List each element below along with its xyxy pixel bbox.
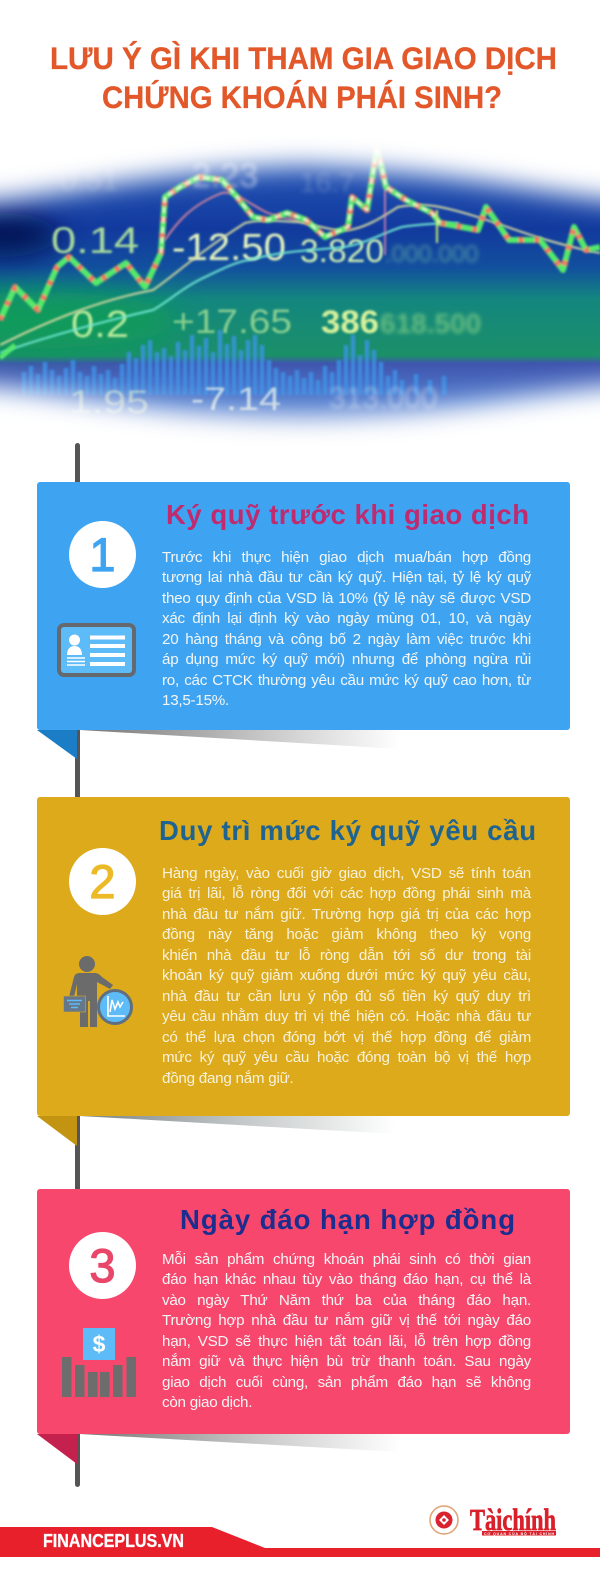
moving average lines [0, 193, 600, 353]
bright numbers [51, 220, 384, 420]
number 2: 2 [89, 855, 116, 908]
faded numbers: 0.51 [60, 164, 118, 197]
panel 2 text: khoản ký quỹ giảm xuống dưới mức ký quỹ yêu cầu, [162, 967, 531, 984]
panel 2 text [162, 865, 532, 1087]
panel 1 text: ro, các CTCK thường yêu cầu mức ký quỹ cao hơn, từ [162, 672, 531, 689]
title: CHỨNG KHOÁN PHÁI SINH? [102, 79, 502, 115]
panel 1 shadow [80, 730, 380, 748]
title: LƯU Ý GÌ KHI THAM GIA GIAO DỊCH [50, 40, 557, 76]
faded numbers: 313.000 [329, 382, 437, 415]
panel 2 text: khiến nhà đầu tư lỗ ròng dẫn tới số dư trong tài [162, 947, 531, 964]
panel 3 text: Trường hợp nhà đầu tư nắm giữ vị thế tới ngày đáo [162, 1312, 531, 1329]
panel 2 fold [37, 1116, 77, 1146]
panel 2 text: đồng đang nắm giữ. [162, 1070, 293, 1087]
panel 1 text: Trước khi thực hiện giao dịch mua/bán hợp đồng [162, 549, 531, 566]
panel 1 text: 20 hàng tháng và công bố 2 ngày làm việc trước khi [162, 631, 531, 648]
panel 2 shadow [80, 1116, 374, 1132]
faded numbers: 2.23 [192, 157, 258, 195]
panel 3: contract expiry date [37, 1189, 570, 1434]
icon: dollar and bars [62, 1328, 136, 1397]
panel 2 text: nhà đầu tư cần lưu ý nộp đủ số tiền ký quỹ duy trì [162, 988, 531, 1005]
panel 3 text: nắm giữ và thực hiện bù trừ thanh toán. Sau ngày [162, 1353, 531, 1370]
bright numbers: 1.95 [69, 384, 149, 420]
panel 3 text [162, 1251, 532, 1411]
number 1 [69, 521, 136, 588]
panel 1 text: 13,5-15%. [162, 692, 229, 709]
logo: Tài chính: Tàichính [470, 1502, 556, 1537]
panel 1 fold [37, 730, 77, 759]
panel 2 text: có thể lựa chọn đóng bớt vị thế hợp đồng để giảm [162, 1029, 531, 1046]
panel 1 text: theo quy định của VSD là 10% (tỷ lệ này sẽ được VSD [162, 590, 531, 607]
panel 1 text: tương lai nhà đầu tư cần ký quỹ. Hiện tại, tỷ lệ ký quỹ [162, 569, 531, 586]
panel 2 heading: Duy trì mức ký quỹ yêu cầu [159, 815, 536, 846]
panel 3 text: hạn, VSD sẽ thực hiện tất toán lãi, lỗ trên hợp đồng [162, 1333, 531, 1350]
faded numbers: 16.7 [300, 167, 354, 198]
panel 3 text: Mỗi sản phẩm chứng khoán phái sinh có thời gian [162, 1251, 531, 1268]
logo: Tài chính [429, 1502, 556, 1537]
number 2 [69, 848, 136, 915]
number 1: 1 [89, 528, 116, 581]
footer band: FINANCEPLUS.VN [43, 1531, 184, 1551]
panel 1 heading: Ký quỹ trước khi giao dịch [166, 499, 529, 530]
bright numbers: -12.50 [172, 227, 286, 269]
footer band [0, 1527, 600, 1557]
panel 3 text: giao dịch cuối cùng, sản phẩm đáo hạn sẽ không [162, 1374, 531, 1391]
panel 2 text: giá trị lãi, lỗ ròng đối với các hợp đồng phái sinh mà [162, 885, 531, 902]
panel 1 text: xác định lại định kỳ vào ngày mùng 01, 10, và ngày [162, 610, 531, 627]
panel 1 text [162, 549, 532, 709]
candlestick price line [0, 147, 600, 358]
number 3 [69, 1232, 136, 1298]
panel 2 text: mức ký quỹ yêu cầu hoặc đóng toàn bộ vị thế hợp [162, 1049, 531, 1066]
panel 3 fold [37, 1434, 77, 1464]
bright numbers: +17.65 [172, 303, 292, 341]
panel 3 heading: Ngày đáo hạn hợp đồng [180, 1204, 515, 1235]
panel 3 text: vào ngày Thứ Năm thứ ba của tháng đáo hạn. [162, 1292, 531, 1309]
panel 2 text: đồng này tăng hoặc giảm không theo kỳ vọng [162, 926, 531, 943]
bright numbers: 0.2 [71, 304, 129, 346]
panel 3 text: còn giao dịch. [162, 1394, 252, 1411]
logo: Tài chính: CƠ QUAN CỦA BỘ TÀI CHÍNH [484, 1531, 554, 1536]
dark navy patch at left [0, 213, 60, 257]
panel 2 text: Hàng ngày, vào cuối giờ giao dịch, VSD sẽ tính toán [162, 865, 531, 882]
number 3: 3 [89, 1238, 116, 1292]
panel 3 text: đáo hạn khác nhau tùy vào tháng đáo hạn, cụ thể là [162, 1271, 531, 1288]
bright numbers: 3.820 [300, 233, 384, 269]
faded numbers: .000.000 [385, 241, 478, 268]
timeline bar [75, 443, 80, 1487]
fine bar histogram [24, 330, 444, 395]
title [50, 40, 557, 115]
green glow at left [0, 292, 180, 348]
hero image: stock market chart [0, 145, 600, 436]
panel 2 text: nhà đầu tư nắm giữ. Trường hợp giá trị của các hợp [162, 906, 531, 923]
faded numbers: 618.500 [380, 308, 481, 339]
faded numbers [89, 162, 482, 410]
panel 2 text: yêu cầu nhằm duy trì vị thế hiện có. Hoặc nhà đầu tư [162, 1008, 531, 1025]
icon: id card [57, 623, 136, 677]
panel 2: maintain required margin [37, 797, 570, 1116]
icon: investor with chart [64, 956, 133, 1027]
bright numbers: -7.14 [191, 381, 281, 417]
bright numbers: 386 [321, 304, 379, 340]
panel 1: margin deposit [37, 482, 570, 730]
bright numbers: 0.14 [51, 220, 139, 261]
icon: dollar and bars: $ [93, 1331, 106, 1357]
panel 1 text: áp dụng mức ký quỹ mới) nhưng để phòng ngừa rủi [162, 651, 531, 668]
